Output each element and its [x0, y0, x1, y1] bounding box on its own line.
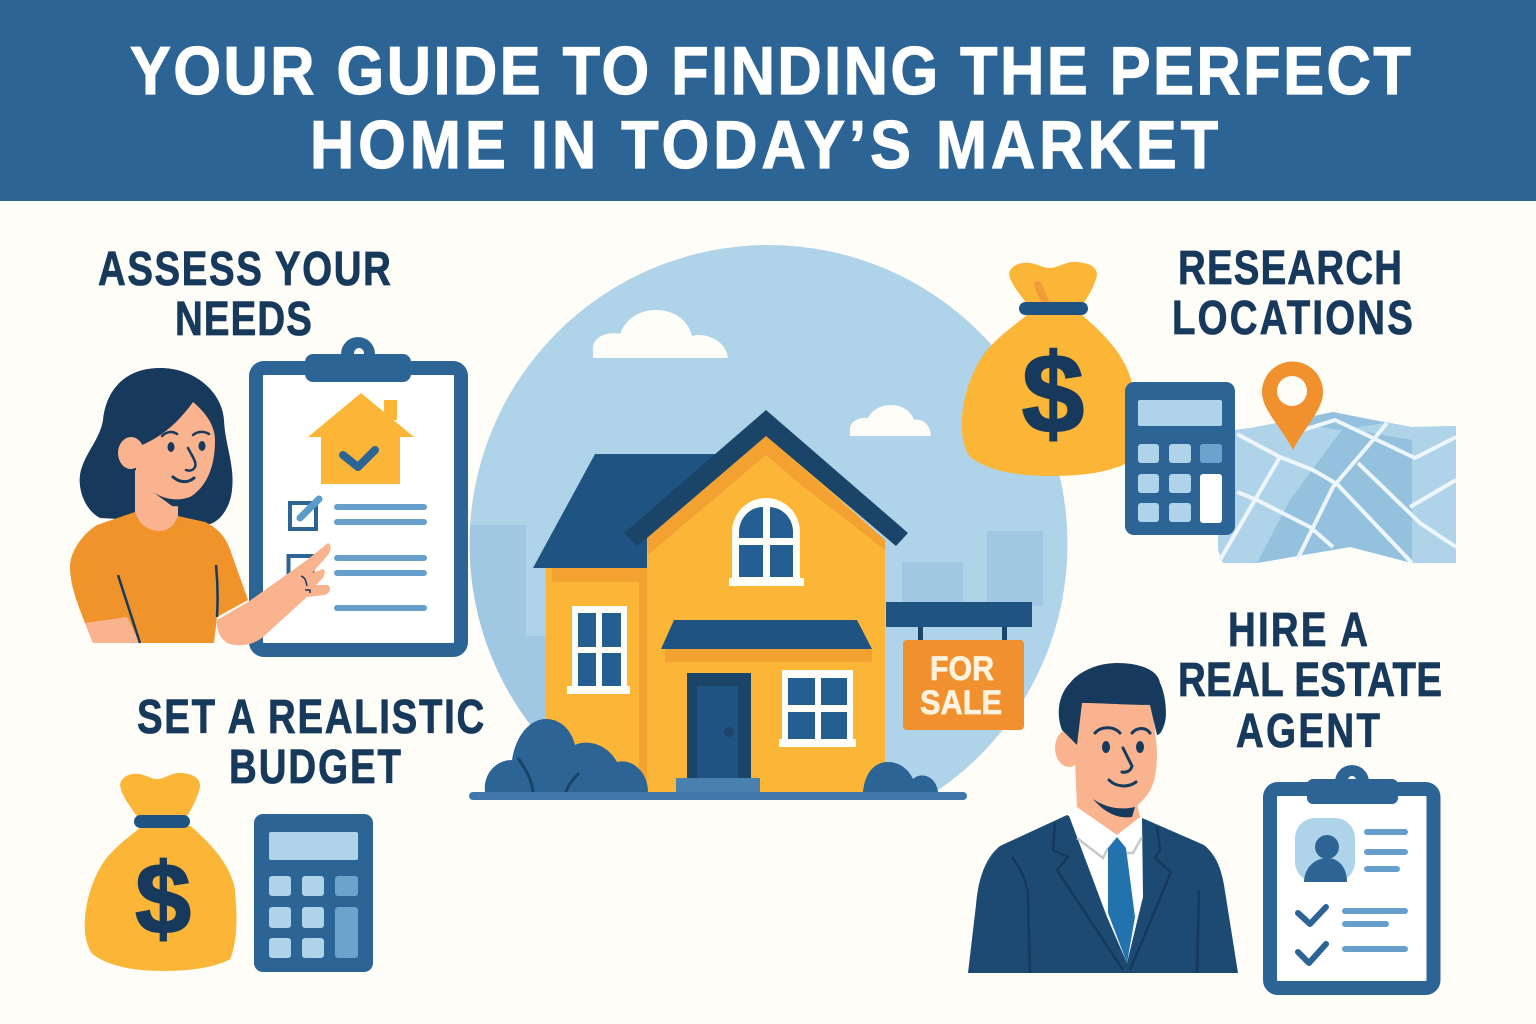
for sale sign: SALE	[920, 684, 1002, 722]
heading: set a realistic budget: BUDGET	[229, 741, 401, 794]
checkbox empty	[288, 556, 312, 580]
arm and pointing hand	[217, 543, 331, 645]
title banner	[0, 0, 1536, 201]
sign text: FOR	[930, 650, 994, 688]
section: hire a real estate agent	[968, 604, 1442, 988]
bushes	[485, 719, 938, 792]
heading: assess your needs	[98, 243, 391, 346]
neck and ear	[1055, 729, 1083, 767]
shirt	[70, 512, 248, 643]
title line 2: HOME IN TODAY’S MARKET	[310, 106, 1218, 183]
profile text lines	[1342, 829, 1408, 952]
calculator	[254, 814, 373, 972]
checkbox ticked	[290, 499, 319, 529]
heading: set a realistic budget	[137, 691, 484, 794]
hair	[1059, 663, 1166, 745]
clipboard checklist	[256, 337, 461, 650]
title line 1: YOUR GUIDE TO FINDING THE PERFECT	[130, 32, 1411, 109]
left window	[567, 606, 630, 694]
cloud left	[593, 310, 728, 358]
heading: research locations: RESEARCH	[1178, 242, 1402, 295]
location pin	[1262, 361, 1323, 450]
woman pointing at clipboard	[70, 368, 331, 645]
right window	[779, 670, 856, 747]
businessman agent	[968, 663, 1238, 973]
checklist lines	[334, 504, 427, 611]
heading: assess your needs: ASSESS YOUR	[98, 243, 391, 296]
house with check icon	[308, 393, 414, 484]
money bag: $	[1022, 331, 1084, 456]
section: assess your needs	[70, 243, 461, 650]
money bag: $	[135, 843, 191, 955]
door	[676, 673, 760, 793]
arched window	[729, 498, 804, 586]
heading: research locations: LOCATIONS	[1172, 292, 1413, 345]
heading: research locations	[1172, 242, 1413, 345]
house	[533, 410, 908, 793]
map	[1218, 412, 1456, 563]
money bag	[85, 773, 236, 971]
heading: hire a real estate agent	[1178, 604, 1442, 758]
face	[1075, 700, 1157, 812]
smile shadow	[1093, 799, 1135, 817]
profile photo	[1295, 818, 1355, 882]
ground line	[469, 792, 967, 800]
central scene: house for sale	[469, 245, 1068, 800]
suit	[968, 815, 1238, 973]
tie	[1108, 837, 1135, 963]
cloud right	[850, 405, 931, 436]
money bag	[962, 262, 1134, 476]
heading: assess your needs: NEEDS	[175, 293, 312, 346]
section: set a realistic budget	[85, 691, 484, 972]
shirt and collar	[1068, 790, 1143, 963]
lapel lines	[1012, 823, 1199, 973]
sky circle with skyline	[470, 245, 1068, 790]
porch roof	[661, 620, 872, 662]
heading: set a realistic budget: SET A REALISTIC	[137, 691, 484, 744]
heading: hire a real estate agent: HIRE A	[1228, 604, 1368, 657]
heading: hire a real estate agent: REAL ESTATE	[1178, 654, 1442, 707]
calculator	[1125, 382, 1235, 535]
clipboard profile	[1270, 765, 1434, 988]
face details	[1095, 728, 1150, 786]
face details	[162, 432, 209, 482]
section: research locations	[962, 242, 1456, 563]
heading: hire a real estate agent: AGENT	[1236, 705, 1380, 758]
check marks	[1298, 907, 1326, 963]
for sale sign	[886, 602, 1032, 730]
